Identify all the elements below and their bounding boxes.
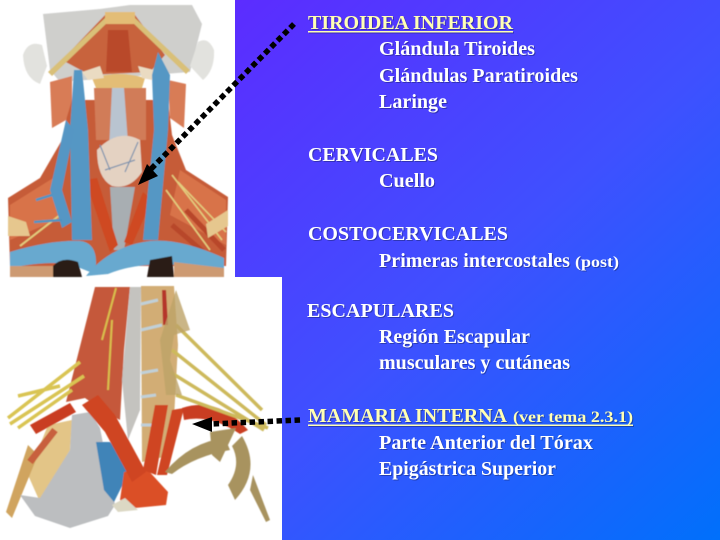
- neck muscles and fascia: [66, 287, 130, 420]
- brachial plexus left: [8, 362, 84, 428]
- superior vena cava: [96, 442, 134, 502]
- left subclavian artery: [30, 403, 76, 434]
- jaw muscles: [62, 15, 165, 75]
- larynx and thyroid gland: [94, 88, 146, 140]
- jugular veins and subclavian veins: [70, 52, 170, 240]
- external veins: [50, 120, 74, 228]
- text block: escapulares: ESCAPULARES: [307, 300, 454, 322]
- aortic arch: [120, 468, 168, 508]
- text block: cervicales: [308, 144, 438, 192]
- text block: cervicales: CERVICALES: [308, 144, 438, 166]
- head and jaw in gray: [43, 5, 202, 82]
- text block: mamaria interna: (ver tema 2.3.1): [513, 409, 633, 426]
- vertebral column: [141, 286, 178, 462]
- text block: costocervicales: COSTOCERVICALES: [308, 223, 508, 245]
- arrow: tiroidea inferior to thyroid: [138, 24, 294, 185]
- text block: tiroidea inferior: Glándula Tiroides: [379, 38, 535, 60]
- text block: mamaria interna: Epigástrica Superior: [379, 458, 556, 480]
- panel: blue gradient background: [235, 0, 720, 540]
- text block: tiroidea inferior: Laringe: [379, 91, 447, 113]
- common carotid arteries: [85, 178, 152, 252]
- text block: tiroidea inferior: [308, 12, 578, 113]
- text block: tiroidea inferior: TIROIDEA INFERIOR: [308, 12, 514, 34]
- clavicles: [8, 210, 228, 238]
- thoracic openings: [53, 256, 174, 277]
- right ribs: [165, 438, 230, 474]
- neck and shoulder muscles: [8, 100, 228, 266]
- illustration: neck anatomy, anterior view: [8, 5, 228, 277]
- illustration: thoracic outlet and subclavian arteries: [6, 286, 270, 528]
- right subclavian artery: [182, 405, 248, 434]
- text block: tiroidea inferior: Glándulas Paratiroides: [379, 65, 578, 87]
- text block: cervicales: Cuello: [379, 170, 435, 192]
- lung in gray: [20, 412, 115, 528]
- text block: escapulares: Región Escapular: [379, 326, 530, 348]
- text block: escapulares: musculares y cutáneas: [379, 352, 570, 374]
- text block: costocervicales: Primeras intercostales: [379, 250, 570, 272]
- text block: mamaria interna: [308, 405, 633, 480]
- text block: costocervicales: (post): [575, 254, 619, 271]
- left bones and scapula: [28, 420, 72, 502]
- brachial plexus right: [170, 325, 268, 430]
- brachiocephalic and carotid arteries: [82, 395, 146, 482]
- text block: mamaria interna: MAMARIA INTERNA: [308, 405, 508, 427]
- text block: costocervicales: [308, 223, 619, 272]
- arrow: mamaria interna to artery: [192, 417, 300, 432]
- text block: mamaria interna: Parte Anterior del Tórax: [379, 432, 593, 454]
- ears: [23, 40, 214, 84]
- text block: escapulares: [307, 300, 570, 374]
